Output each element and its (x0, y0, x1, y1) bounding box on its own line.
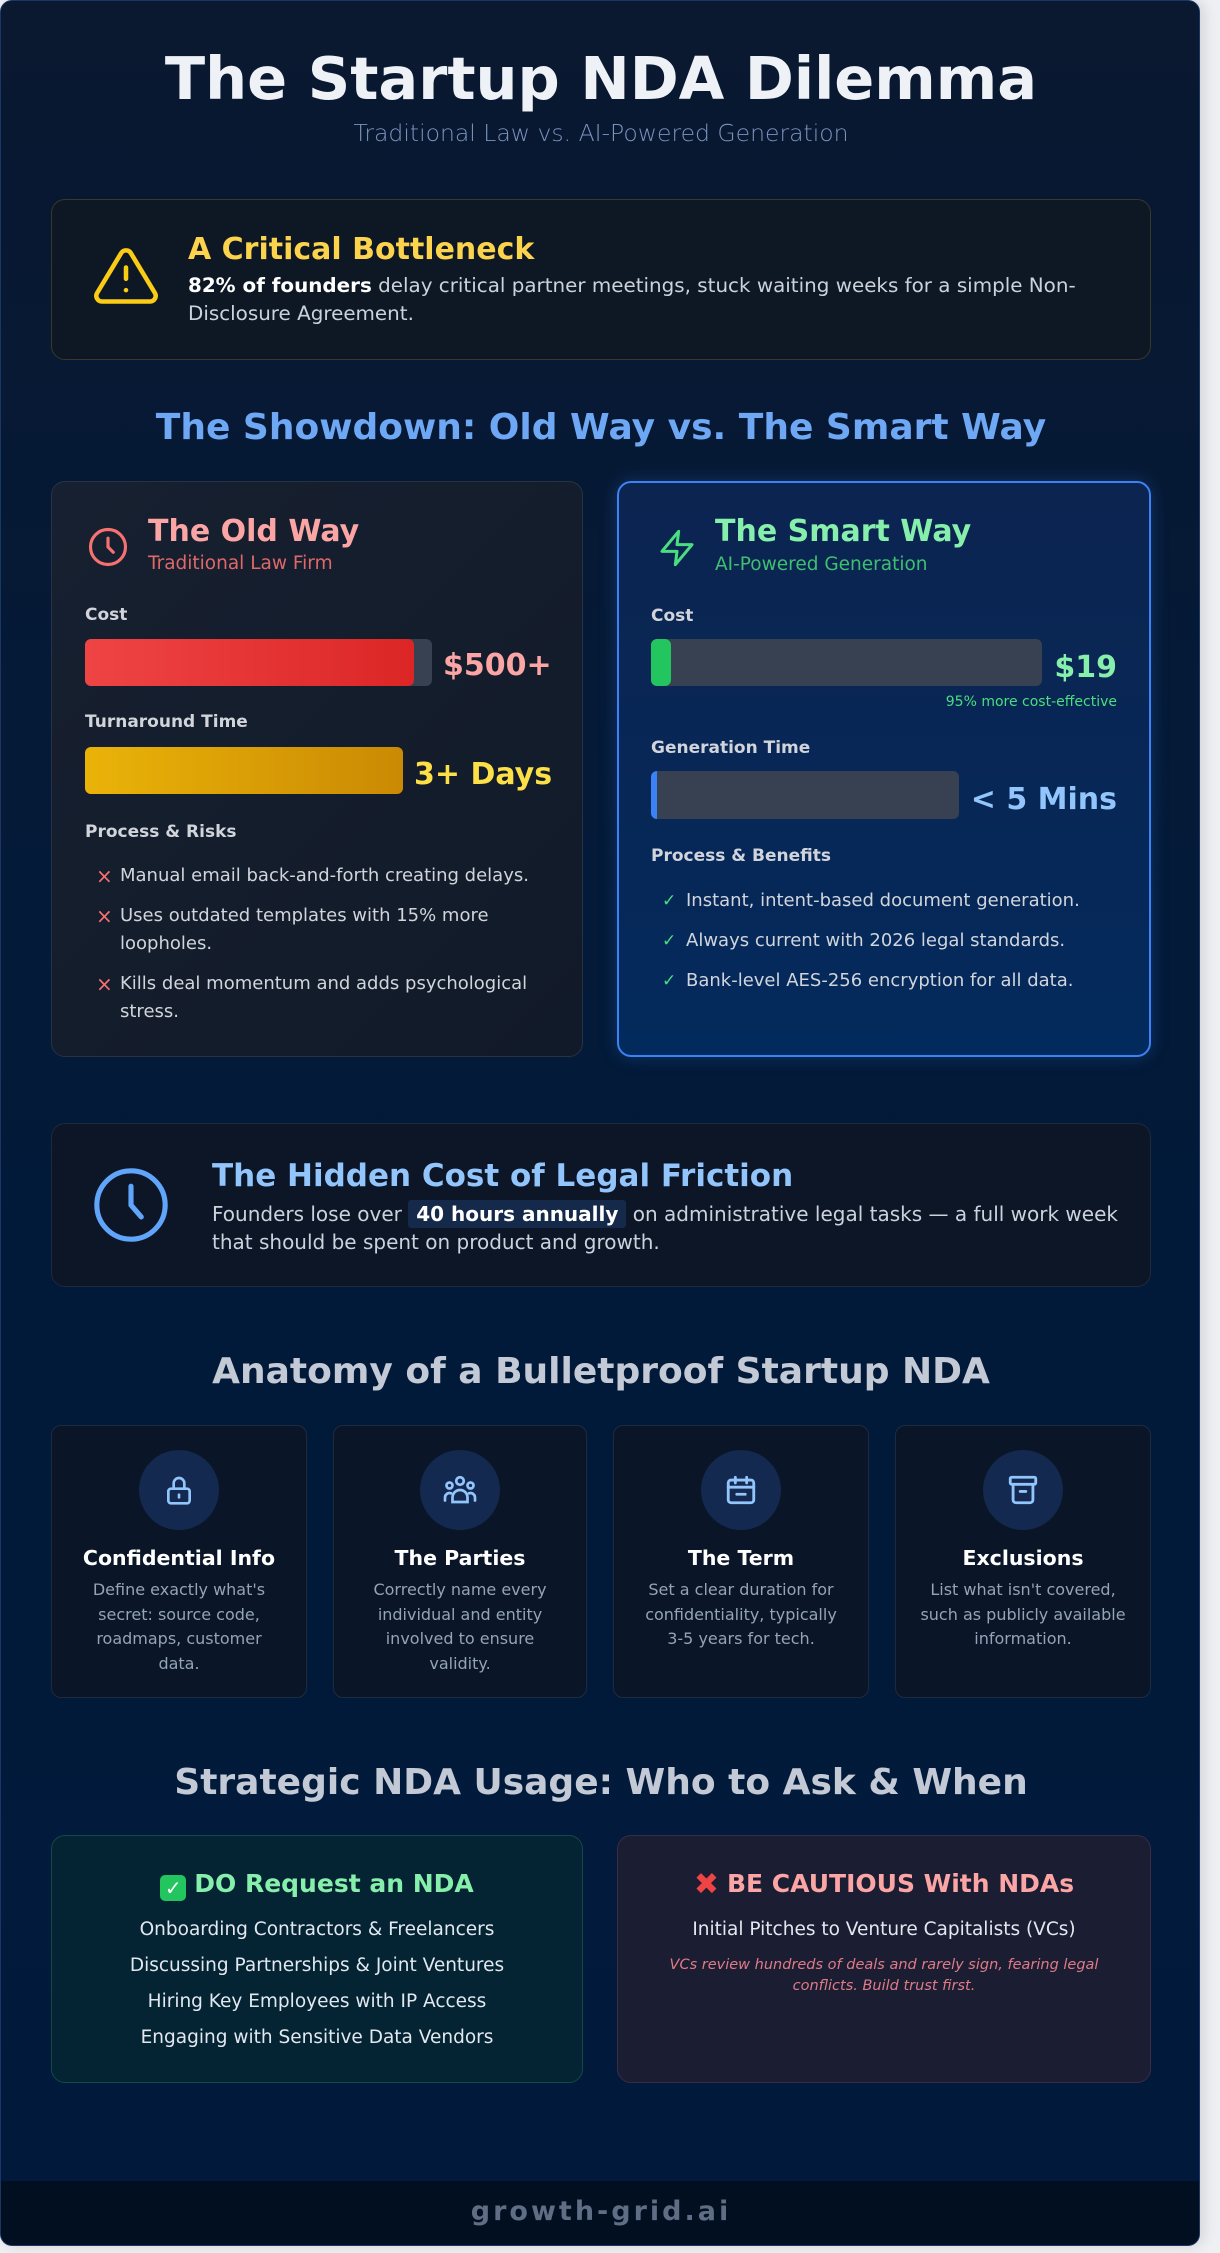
card: term: Set a clear duration for confidentiality, typically 3-5 years for tech. (645, 1580, 837, 1648)
panel: do request (51, 1835, 583, 2083)
list: benefits (662, 890, 1080, 991)
card: parties: Correctly name every individual and entity involved to ensure validity. (373, 1580, 547, 1672)
list: risks: Manual email back-and-forth creating delays. (120, 865, 529, 886)
icon: people (420, 1450, 500, 1530)
text: Founders lose over 40 hours annually on administrative legal tasks — a full work week that should be spent on product and growth. (212, 1202, 1118, 1254)
heading: DO Request an NDA (194, 1869, 474, 1898)
turnaround label: Turnaround Time (85, 712, 248, 732)
bar: time (85, 747, 403, 794)
subheading: Traditional Law Firm (148, 553, 333, 574)
bar: cost (651, 639, 1042, 686)
bar: cost (85, 639, 432, 686)
panel: old way: × (96, 972, 113, 996)
icon: clock blue (94, 1168, 168, 1242)
text: Initial Pitches to Venture Capitalists (VCs) (692, 1919, 1076, 1940)
title: The Startup NDA Dilemma (165, 44, 1037, 113)
card: exclusions (895, 1425, 1151, 1698)
generation label: Generation Time (651, 738, 810, 758)
cost label: Cost (651, 606, 693, 626)
list: risks: Uses outdated templates with 15% more loopholes. (120, 905, 489, 954)
panel: smart way (617, 481, 1151, 1057)
value: $500+ (443, 648, 552, 683)
subheading: AI-Powered Generation (715, 554, 928, 575)
card: confidential info: Define exactly what's secret: source code, roadmaps, customer data. (93, 1580, 265, 1672)
card: parties: The Parties (395, 1546, 525, 1570)
icon: warning (94, 248, 158, 304)
bar: time (651, 771, 959, 819)
panel: old way: × (96, 904, 113, 928)
list: risks (96, 864, 529, 1022)
list (130, 1919, 504, 2048)
heading: ✖ BE CAUTIOUS With NDAs (694, 1867, 1074, 1902)
list: Engaging with Sensitive Data Vendors (141, 2027, 493, 2048)
list: benefits: Always current with 2026 legal standards. (686, 930, 1065, 951)
panel: smart way: ✓ (662, 971, 676, 991)
cost label: Cost (85, 605, 127, 625)
list: Discussing Partnerships & Joint Ventures (130, 1955, 504, 1976)
panel: old way (51, 481, 583, 1057)
risks label: Process & Risks (85, 822, 236, 842)
note: 95% more cost-effective (946, 694, 1117, 710)
panel: hidden cost (51, 1123, 1151, 1287)
panel: smart way: ✓ (662, 891, 676, 911)
card: confidential info (51, 1425, 307, 1698)
icon: clock red (88, 528, 128, 566)
subtitle: Traditional Law vs. AI-Powered Generation (353, 119, 849, 147)
heading: strategic usage: Strategic NDA Usage: Who to Ask & When (174, 1762, 1028, 1803)
icon: archive (983, 1450, 1063, 1530)
note: VCs review hundreds of deals and rarely sign, fearing legal conflicts. Build trust first. (670, 1957, 1098, 1994)
panel: be cautious (617, 1835, 1151, 2083)
card: term: The Term (688, 1546, 794, 1570)
panel: critical bottleneck (51, 199, 1151, 360)
text: 82% of founders delay critical partner meetings, stuck waiting weeks for a simple Non-Disclosure Agreement. (188, 274, 1076, 325)
card: exclusions: List what isn't covered, such as publicly available information. (920, 1580, 1126, 1648)
value: < 5 Mins (971, 782, 1117, 817)
heading: The Hidden Cost of Legal Friction (212, 1158, 793, 1194)
heading: ✓ (165, 1876, 182, 1900)
list: benefits: Bank-level AES-256 encryption for all data. (686, 970, 1073, 991)
benefits label: Process & Benefits (651, 846, 831, 866)
footer (1, 2181, 1201, 2247)
panel: old way: × (96, 864, 113, 888)
panel: smart way: ✓ (662, 931, 676, 951)
heading: anatomy: Anatomy of a Bulletproof Startup NDA (212, 1351, 990, 1392)
footer: growth-grid.ai (471, 2196, 731, 2227)
list: Hiring Key Employees with IP Access (148, 1991, 486, 2012)
card: confidential info: Confidential Info (83, 1546, 275, 1570)
list: benefits: Instant, intent-based document generation. (686, 890, 1080, 911)
card: term (613, 1425, 869, 1698)
heading: The Old Way (148, 514, 359, 549)
icon: lock (139, 1450, 219, 1530)
icon: bolt (660, 530, 694, 566)
card: exclusions: Exclusions (962, 1546, 1084, 1570)
card: parties (333, 1425, 587, 1698)
icon: calendar (701, 1450, 781, 1530)
heading: showdown: The Showdown: Old Way vs. The Smart Way (156, 407, 1046, 448)
heading: The Smart Way (715, 514, 971, 549)
heading: A Critical Bottleneck (188, 232, 534, 267)
list: Onboarding Contractors & Freelancers (140, 1919, 494, 1940)
value: 3+ Days (414, 757, 552, 792)
value: $19 (1054, 650, 1117, 685)
list: risks: Kills deal momentum and adds psychological stress. (120, 973, 527, 1022)
